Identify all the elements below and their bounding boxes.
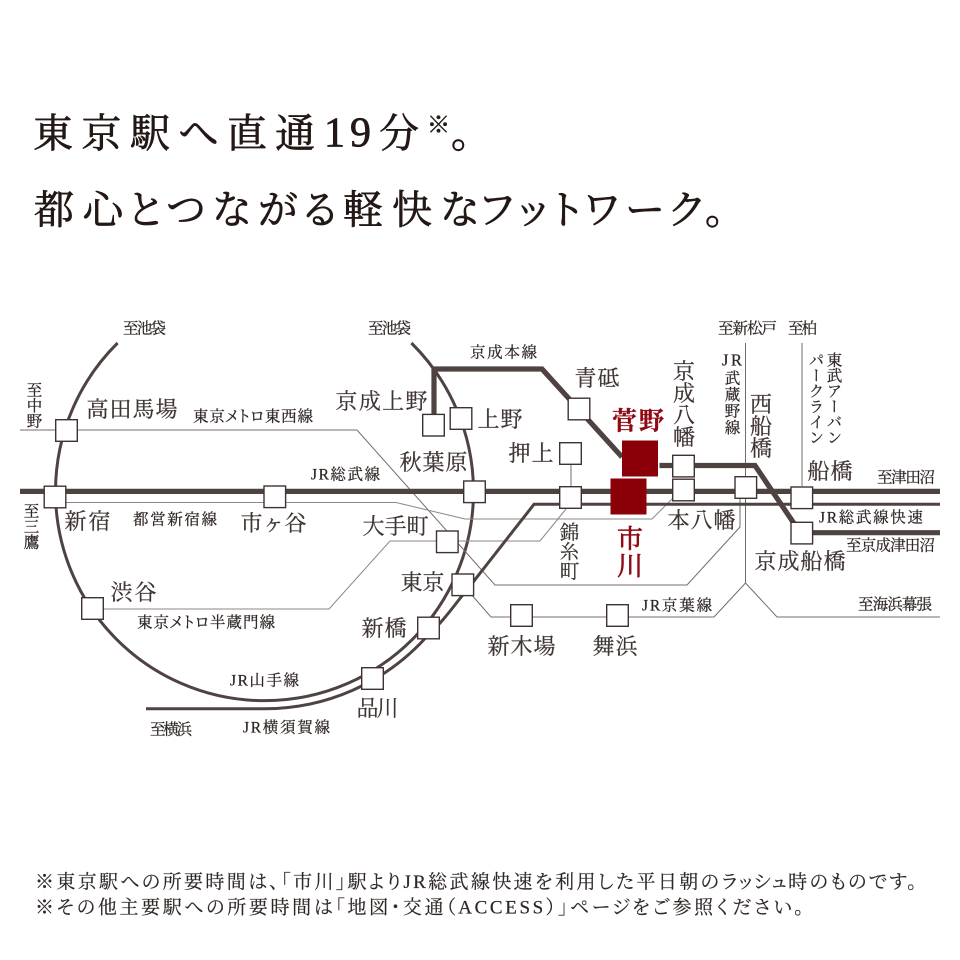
title [33,110,745,232]
line and direction labels: 東武アーバン [824,352,842,445]
station labels: 秋葉原 [400,450,468,475]
station labels: 東京 [400,570,444,595]
line and direction labels [22,320,935,738]
title: 分 [379,111,419,156]
line and direction labels: 至海浜幕張 [858,596,932,614]
line and direction labels: JR横須賀線 [243,718,330,736]
station labels: 青砥 [574,366,620,391]
line and direction labels: JR総武線快速 [819,508,923,526]
line: Tokyo Metro Tozai [20,430,740,585]
footnote [35,871,917,918]
station labels: 押上 [508,441,554,466]
line and direction labels: 至横浜 [150,720,192,738]
line and direction labels: 東京メトロ半蔵門線 [137,614,275,632]
line and direction labels: 至津田沼 [877,468,935,486]
line and direction labels: 武蔵野線 [722,370,740,436]
line and direction labels: 至柏 [788,320,817,338]
station labels: 高田馬場 [86,397,178,422]
title: 都心とつながる軽快なフットワーク。 [34,188,745,232]
station labels: 京成八幡 [670,360,696,448]
line: JR Yamanote loop [56,343,473,701]
line: Oshiage link [570,464,572,486]
line: Tobu Urban Park [801,343,803,486]
title: 19 [324,110,371,156]
title: ※ [427,112,450,138]
line and direction labels: 至池袋 [123,320,166,338]
line and direction labels: JR総武線 [311,466,380,484]
line and direction labels: 都営新宿線 [133,510,217,528]
line: Toei Shinjuku [55,498,673,519]
station labels: 西船橋 [748,393,772,459]
station labels: 品川 [356,696,398,721]
label: 菅野: 菅野 [612,408,664,436]
station labels: 船橋 [808,459,852,484]
station labels: 本八幡 [668,508,736,533]
title: 。 [451,111,491,156]
line and direction labels: JR京葉線 [642,596,712,614]
line: Tokyo Metro Hanzomon [92,509,566,609]
line and direction labels: 至池袋 [368,320,411,338]
station labels: 舞浜 [592,634,638,659]
line and direction labels: 至京成津田沼 [846,536,935,554]
station labels: 京成船橋 [754,549,846,574]
line and direction labels: JR [722,350,742,370]
station labels: 上野 [478,407,522,432]
line: Keisei east [660,466,940,533]
line: JR Keiyo and Musashino [463,343,940,617]
footnote: ※その他主要駅への所要時間は「地図・交通（ACCESS）」ページをご参照ください。 [35,896,804,918]
station marker: 菅野 [622,440,658,476]
line and direction labels: 至中野 [24,382,42,429]
station labels [64,360,852,721]
line: Keisei main [434,369,622,457]
station labels: 大手町 [362,514,428,539]
station labels: 錦糸町 [556,522,579,580]
line and direction labels: 京成本線 [470,344,537,362]
line: JR Sobu [20,489,940,494]
line and direction labels: 東京メトロ東西線 [193,408,313,426]
line and direction labels: パークライン [806,352,824,445]
label: 市川: 市川 [614,525,642,579]
station labels: 市ヶ谷 [240,511,306,536]
station labels: 新橋 [362,616,406,641]
stations [44,398,813,689]
station labels: 京成上野 [336,389,428,414]
footnote: ※東京駅への所要時間は、「市川」駅よりJR総武線快速を利用した平日朝のラッシュ時のものです。 [35,871,917,893]
station labels: 新宿 [64,509,110,534]
station labels: 新木場 [488,634,556,659]
station labels: 渋谷 [110,580,156,605]
line and direction labels: 至新松戸 [718,320,777,338]
route map [20,343,940,709]
title: 東京駅へ直通 [33,111,315,156]
line and direction labels: 至三鷹 [22,503,39,551]
line: JR Yokosuka and Sobu rapid [146,504,940,709]
station marker: 市川 [610,478,646,514]
line and direction labels: JR山手線 [230,672,299,690]
